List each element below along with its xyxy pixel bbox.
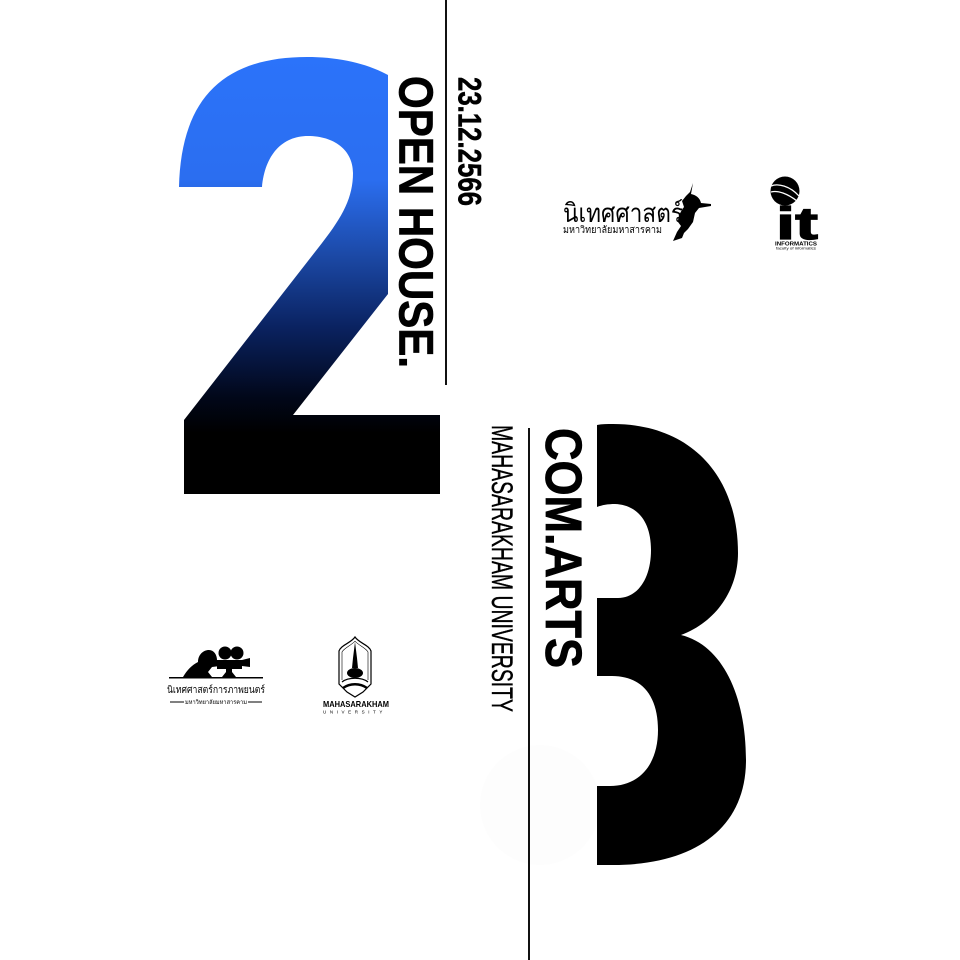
icon: university seal <box>339 637 371 697</box>
logo: informatics: faculty of informatics <box>776 246 816 250</box>
heading: open house: OPEN HOUSE. <box>388 76 442 368</box>
logo: mahasarakham university <box>323 637 389 714</box>
date: 23.12.2566 <box>452 77 488 206</box>
logo: communication arts: นิเทศศาสตร์ <box>563 198 683 228</box>
big numeral 2 <box>179 57 440 494</box>
logo: film: นิเทศศาสตร์การภาพยนตร์ <box>167 684 266 696</box>
logo: informatics: it <box>776 198 818 249</box>
logo: film <box>167 646 266 706</box>
icon: jumping figure <box>673 183 711 241</box>
logo: informatics <box>770 176 818 250</box>
subheading: university: MAHASARAKHAM UNIVERSITY <box>485 425 518 712</box>
logo: film: มหาวิทยาลัยมหาสารคาม <box>185 699 247 706</box>
logo: informatics: INFORMATICS <box>775 242 817 248</box>
logo: mahasarakham university: UNIVERSITY <box>323 710 386 714</box>
icon: striped globe <box>770 176 800 206</box>
divider top <box>445 0 447 385</box>
divider bottom <box>528 428 530 960</box>
big numeral 3 <box>597 424 746 865</box>
logo: communication arts: มหาวิทยาลัยมหาสารคาม <box>563 225 662 236</box>
icon: cameraman <box>169 646 263 678</box>
logo: communication arts <box>563 183 711 241</box>
heading: com arts: COM.ARTS <box>535 428 592 668</box>
logo: mahasarakham university: MAHASARAKHAM <box>323 699 389 709</box>
